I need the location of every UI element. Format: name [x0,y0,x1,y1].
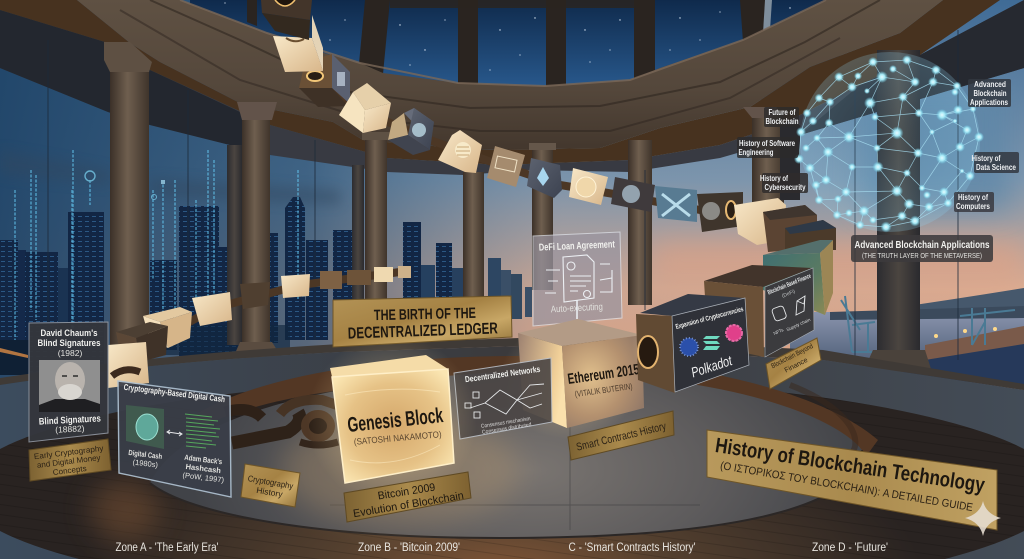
label: history of computers: History of [958,193,988,202]
block: brown 14 [763,205,817,252]
panel: DeFi loan agreement: DeFi Loan Agreement [539,239,616,254]
block: light 6 [438,130,482,173]
plaque: cryptography history [241,464,300,507]
block: dark [240,282,270,309]
block: ethereum 2015: (VITALIK BUTERIN) [574,381,633,399]
stone columns [104,42,932,372]
panel: decentralized networks: Consensus distributed [482,422,532,436]
plaque: bitcoin 2009 evolution of blockchain: Bitcoin 2009 [377,482,436,502]
label: history of computers [954,192,994,212]
window sky backdrop [0,0,1024,400]
block: dark round 12 [697,192,743,232]
block: teal 16 [763,240,833,315]
block: light large [192,292,232,326]
panel: cryptography-based digital cash: (PoW, 1997) [182,471,225,485]
icon: sparkle watermark [965,501,1001,536]
block: slate 5 [388,108,434,155]
block: blue 11 [655,186,697,222]
label: history of data science: History of [972,154,1001,163]
portrait photo [39,360,100,412]
block: light 2 [273,15,323,72]
label: advanced blockchain applications: Applications [970,98,1008,107]
block: blockchain based finance: Blockchain Based Finance [767,273,812,296]
zone captions: Zone B - 'Bitcoin 2009' [358,542,460,554]
label: advanced blockchain applications: Blockchain [974,89,1007,98]
glass mullions [48,30,958,380]
block: dark 1 [261,0,312,40]
panel: cryptography-based digital cash [118,381,231,497]
block: genesis block: Genesis Block [346,404,444,437]
panel: cryptography-based digital cash: Adam Back's [184,453,223,466]
harbour with cranes and containers [790,288,1024,390]
block: light 4 [339,83,391,133]
plaque: main title history of blockchain technology [707,430,997,530]
label: history of cybersecurity [760,173,808,193]
panel: david chaum's blind signatures: (18882) [55,423,85,435]
upper block chain [261,0,836,315]
plaque: blockchain beyond finance: Blockchain Beyond [770,343,814,370]
icon: two-way arrow [167,430,182,436]
panel: DeFi loan agreement [533,232,622,326]
plaque: main title history of blockchain technology: (Ο ΙΣΤΟΡΙΚΟΣ ΤΟΥ BLOCKCHAIN): A DETAILED GUIDE [719,460,974,514]
diagram: consensus network [465,384,544,418]
zone captions: Zone D - 'Future' [812,542,888,554]
curved stone entablature [77,0,943,150]
block: expansion of cryptocurrencies [632,294,749,393]
panel: david chaum's blind signatures [29,322,108,442]
chain links upper [300,60,760,222]
plaque: early cryptography and digital money concepts: and Digital Money [36,453,101,470]
large chain to genesis block [225,400,340,445]
panel: david chaum's blind signatures: David Chaum's [40,328,98,339]
label: advanced blockchain applications: Advanced [974,80,1006,89]
block: ethereum 8 [527,158,562,198]
plaque: bitcoin 2009 evolution of blockchain [344,472,471,522]
night sky dome windows [190,0,840,100]
panel: decentralized networks [454,358,552,439]
plaque: early cryptography and digital money concepts [29,439,111,481]
panel: cryptography-based digital cash: Hashcash [185,462,222,475]
panel: decentralized networks: Decentralized Networks [464,364,541,384]
panel: david chaum's blind signatures: Blind Signatures [38,338,100,349]
block: blockchain based finance: (DeFi) [781,289,796,299]
floor and circular stage [0,337,1024,559]
plaque: early cryptography and digital money concepts: Concepts [52,464,87,477]
label: advanced blockchain applications, truth layer: (THE TRUTH LAYER OF THE METAVERSE) [862,251,982,260]
image: hashcash code [185,414,220,448]
plaque: smart contracts history [568,411,674,460]
image: digital coin [126,405,164,449]
block: round 10 [611,177,655,212]
plaque title: the birth of the decentralized ledger: DECENTRALIZED LEDGER [348,320,498,343]
zone captions [116,542,888,554]
label: history of cybersecurity: Cybersecurity [764,183,806,192]
label: history of computers: Computers [956,202,990,211]
block: light [281,274,310,298]
icon: polkadot [726,325,742,341]
plaque: cryptography history: Cryptography [247,473,295,491]
block: expansion of cryptocurrencies: Polkadot [689,352,735,380]
block: blockchain based finance: NFTs [773,327,785,336]
block: light 13 [734,198,786,245]
label: history of cybersecurity: History of [760,174,788,183]
plaque: early cryptography and digital money concepts: Early Cryptography [33,444,104,461]
plaque: blockchain beyond finance: Finance [784,357,809,374]
plaque: bitcoin 2009 evolution of blockchain: Evolution of Blockchain [352,490,465,520]
plaque title: the birth of the decentralized ledger: THE BIRTH OF THE [374,305,476,324]
label: history of software engineering: History of Software [739,139,795,148]
label: history of data science [972,152,1019,173]
label: advanced blockchain applications, truth layer [851,235,993,262]
panel: decentralized networks: Consensus mechanism [481,416,531,430]
label: future of blockchain: Future of [768,108,796,117]
plaque title: the birth of the decentralized ledger [333,296,512,347]
block: genesis block [307,335,477,505]
block: tan large [143,307,192,348]
block: expansion of cryptocurrencies: Expansion of Cryptocurrencies [675,306,744,331]
plaque: smart contracts history: Smart Contracts History [575,420,668,454]
panel: DeFi loan agreement: Auto-executing [551,302,603,315]
city skyline [0,197,532,375]
label: advanced blockchain applications [968,79,1011,107]
block: ethereum 2015 [500,300,644,440]
lower left block chain [108,266,411,388]
block: blockchain based finance [704,265,814,357]
icon: solana [703,336,720,350]
label: history of software engineering [737,137,798,158]
panel: david chaum's blind signatures: (1982) [58,348,82,358]
dark glass ceiling reflection [0,0,1024,175]
panel: cryptography-based digital cash: Digital Cash [128,448,163,461]
block: light lowest [108,342,149,388]
block: ethereum 2015: Ethereum 2015 [567,361,640,388]
panel: cryptography-based digital cash: Cryptography-Based Digital Cash [123,382,226,404]
block: genesis block: (SATOSHI NAKAMOTO) [353,429,442,447]
icon: chip and box [771,296,805,322]
block: blockchain based finance: Supply chain [786,317,812,332]
far blocks [320,266,411,289]
label: future of blockchain: Blockchain [766,117,799,126]
icon: contract document [545,255,612,302]
icon: cardano [680,338,698,356]
label: history of software engineering: Engineering [738,148,774,157]
label: advanced blockchain applications, truth layer: Advanced Blockchain Applications [854,239,990,251]
holographic data columns [15,150,298,340]
panel: david chaum's blind signatures: Blind Signatures [39,413,101,428]
panel: cryptography-based digital cash: (1980s) [132,458,159,470]
block: tan 7 [487,146,525,187]
block: dark 3 [299,54,350,107]
brown soffit [0,0,1000,165]
zone captions: C - 'Smart Contracts History' [568,542,696,554]
block: dark 15 [785,220,836,250]
plaque: cryptography history: History [256,485,284,499]
label: future of blockchain [764,107,799,127]
block: light 9 [569,168,608,205]
block: dark large [116,322,168,362]
plaque: blockchain beyond finance [766,338,821,389]
zone captions: Zone A - 'The Early Era' [116,542,218,554]
holographic network globe [737,52,1019,232]
